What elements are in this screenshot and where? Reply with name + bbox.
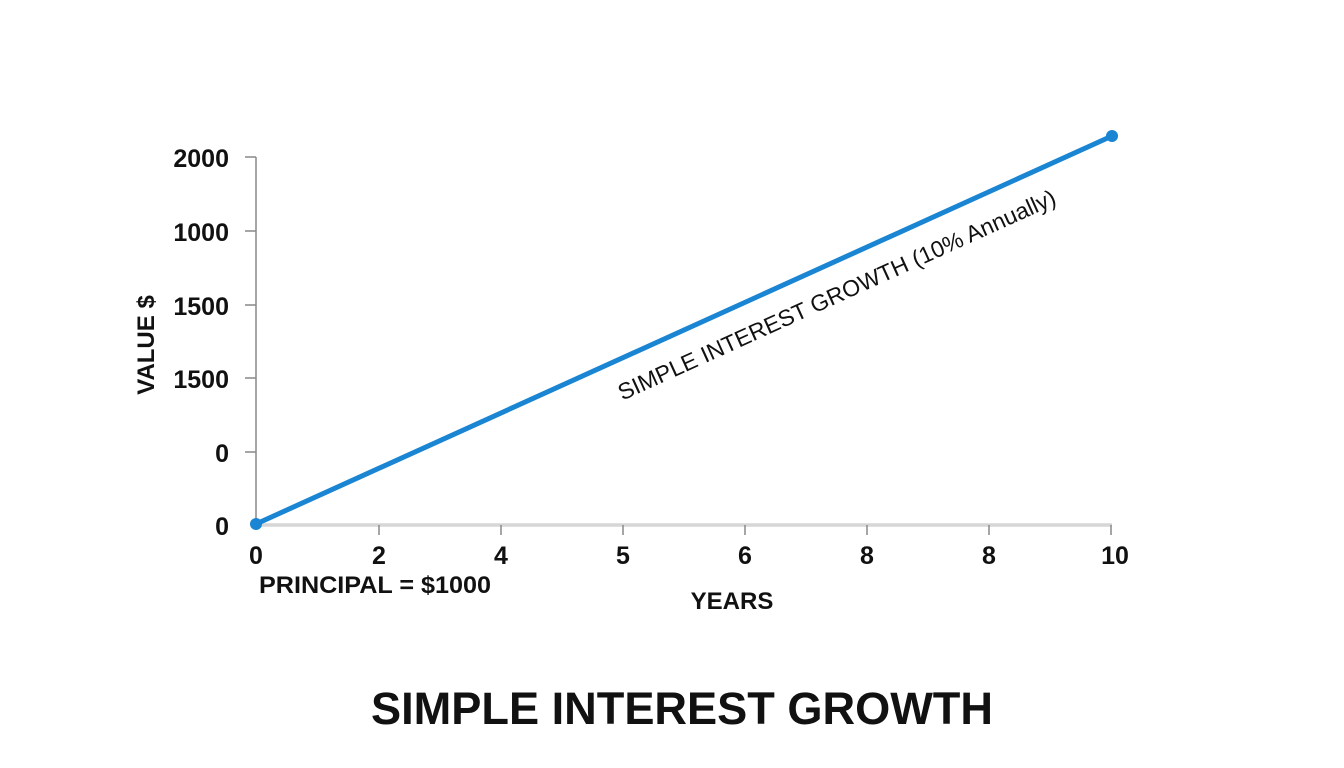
x tick labels: 6 (738, 542, 752, 570)
y tick labels: 0 (215, 513, 229, 541)
x tick labels: 10 (1101, 542, 1129, 570)
y tick labels: 1500 (173, 293, 229, 321)
x axis title: YEARS (691, 588, 773, 615)
y tick labels: 1500 (173, 366, 229, 394)
title: SIMPLE INTEREST GROWTH (371, 683, 993, 734)
x tick labels: 8 (860, 542, 874, 570)
growth line (250, 130, 1118, 530)
y tick labels: 1000 (173, 219, 229, 247)
x tick labels: 5 (616, 542, 630, 570)
x tick labels: 0 (249, 542, 263, 570)
x tick labels: 2 (372, 542, 386, 570)
x tick labels (249, 542, 1129, 570)
x tick labels: 4 (494, 542, 508, 570)
x axis (256, 525, 1112, 535)
x tick labels: 8 (982, 542, 996, 570)
y tick labels: 2000 (173, 145, 229, 173)
y axis title: VALUE $ (133, 295, 160, 395)
principal note: PRINCIPAL = $1000 (259, 572, 491, 599)
y axis (245, 157, 256, 525)
line label: SIMPLE INTEREST GROWTH (10% Annually) (614, 184, 1060, 405)
y tick labels: 0 (215, 440, 229, 468)
y tick labels (173, 145, 229, 541)
